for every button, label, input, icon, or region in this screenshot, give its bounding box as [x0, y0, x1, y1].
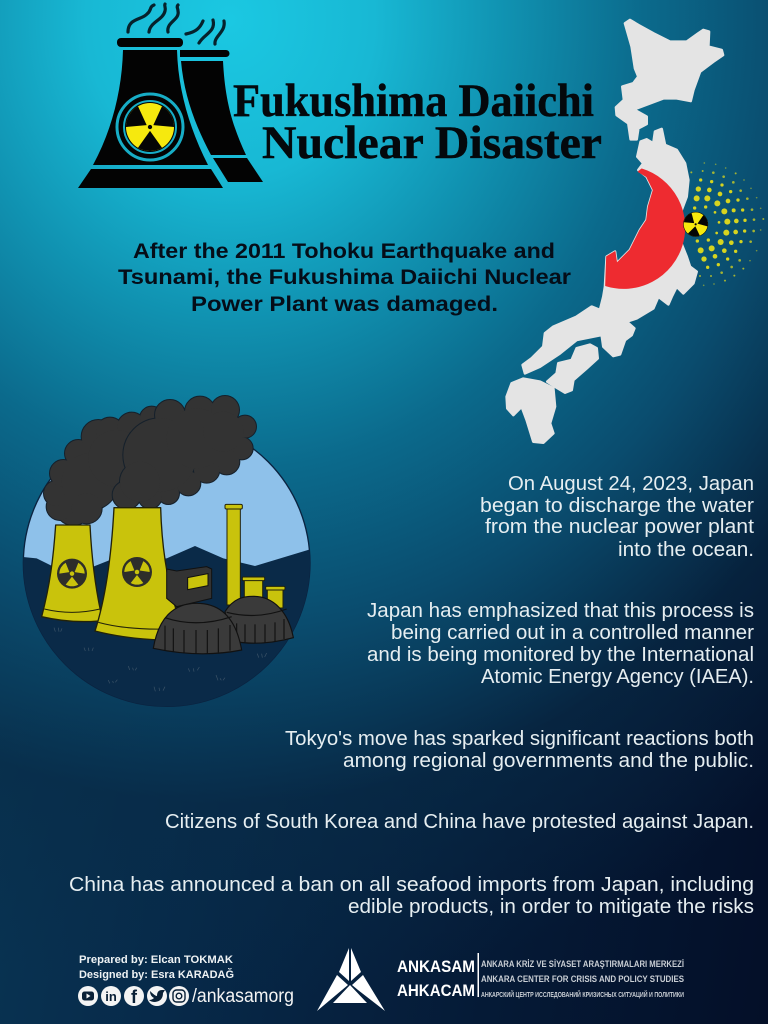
front tower: [117, 38, 183, 47]
back smoke: [44, 407, 163, 525]
discharge dots: [690, 162, 764, 286]
organisation names: ANKARA CENTER FOR CRISIS AND POLICY STUDIES: [481, 974, 684, 984]
paragraph: reactions: among regional governments and the public.: [343, 750, 754, 772]
chimneys: [225, 504, 285, 608]
paragraph: discharge date: into the ocean.: [618, 539, 754, 561]
credits: Prepared by: Elcan TOKMAK: [79, 954, 233, 966]
intro text: Power Plant was damaged.: [191, 293, 498, 316]
radiation emblem: [117, 94, 183, 160]
social handle: /ankasamorg: [192, 986, 294, 1007]
paragraph: discharge date: On August 24, 2023, Japan: [508, 473, 754, 495]
paragraph: reactions: [285, 728, 754, 772]
map of Japan: [507, 20, 764, 443]
ground and mountains: [20, 546, 313, 708]
paragraph: IAEA monitoring: and is being monitored by the International: [367, 644, 754, 666]
paragraph: IAEA monitoring: Japan has emphasized that this process is: [367, 600, 754, 622]
social icons: in: [105, 989, 117, 1004]
logo mark: [317, 948, 385, 1011]
organisation wordmark: ANKASAM: [397, 957, 475, 976]
intro text: [118, 240, 571, 316]
title: [233, 75, 602, 169]
credits: [79, 954, 234, 981]
plant marker: [680, 210, 711, 239]
reactor domes: [153, 596, 293, 654]
organisation wordmark: [397, 957, 475, 1000]
affected zone in red: [606, 169, 685, 288]
intro text: Tsunami, the Fukushima Daiichi Nuclear: [118, 266, 571, 289]
right cooling tower: [95, 508, 176, 640]
paragraph: seafood ban: China has announced a ban on all seafood imports from Japan, including: [69, 874, 754, 896]
intro text: After the 2011 Tohoku Earthquake and: [133, 240, 555, 263]
paragraph: reactions: Tokyo's move has sparked significant reactions both: [285, 728, 754, 750]
front smoke: [113, 396, 256, 509]
grass tufts: [54, 628, 267, 691]
control building: [167, 567, 212, 607]
back tower: [180, 50, 230, 57]
paragraph: IAEA monitoring: [367, 600, 754, 688]
steam lines: [128, 4, 224, 44]
sky: [23, 420, 310, 706]
paragraph: discharge date: [480, 473, 754, 561]
paragraph: discharge date: began to discharge the water: [480, 495, 754, 517]
paragraph: IAEA monitoring: being carried out in a controlled manner: [391, 622, 754, 644]
social icons: [78, 986, 189, 1007]
title: Nuclear Disaster: [262, 117, 602, 169]
organisation wordmark: AHKACAM: [397, 981, 475, 1000]
illustration: nuclear plant circle: [20, 396, 313, 708]
credits: Designed by: Esra KARADAĞ: [79, 968, 234, 981]
paragraph: discharge date: from the nuclear power plant: [485, 516, 754, 538]
social icons: f: [131, 987, 138, 1007]
organisation names: АНКАРСКИЙ ЦЕНТР ИССЛЕДОВАНИЙ КРИЗИСНЫХ СИТУАЦИЙ И ПОЛИТИКИ: [481, 990, 684, 999]
organisation names: ANKARA KRİZ VE SİYASET ARAŞTIRMALARI MERKEZİ: [481, 959, 684, 969]
paragraph: protests: Citizens of South Korea and China have protested against Japan.: [165, 811, 754, 833]
left cooling tower: [42, 525, 101, 622]
paragraph: IAEA monitoring: Atomic Energy Agency (IAEA).: [481, 666, 754, 688]
icon: cooling towers logo: [78, 4, 263, 188]
paragraph: seafood ban: edible products, in order to mitigate the risks: [348, 896, 754, 918]
organisation names: [481, 959, 684, 999]
paragraph: seafood ban: [69, 874, 754, 918]
title: Fukushima Daiichi: [233, 75, 594, 127]
Japan islands: [507, 20, 723, 443]
